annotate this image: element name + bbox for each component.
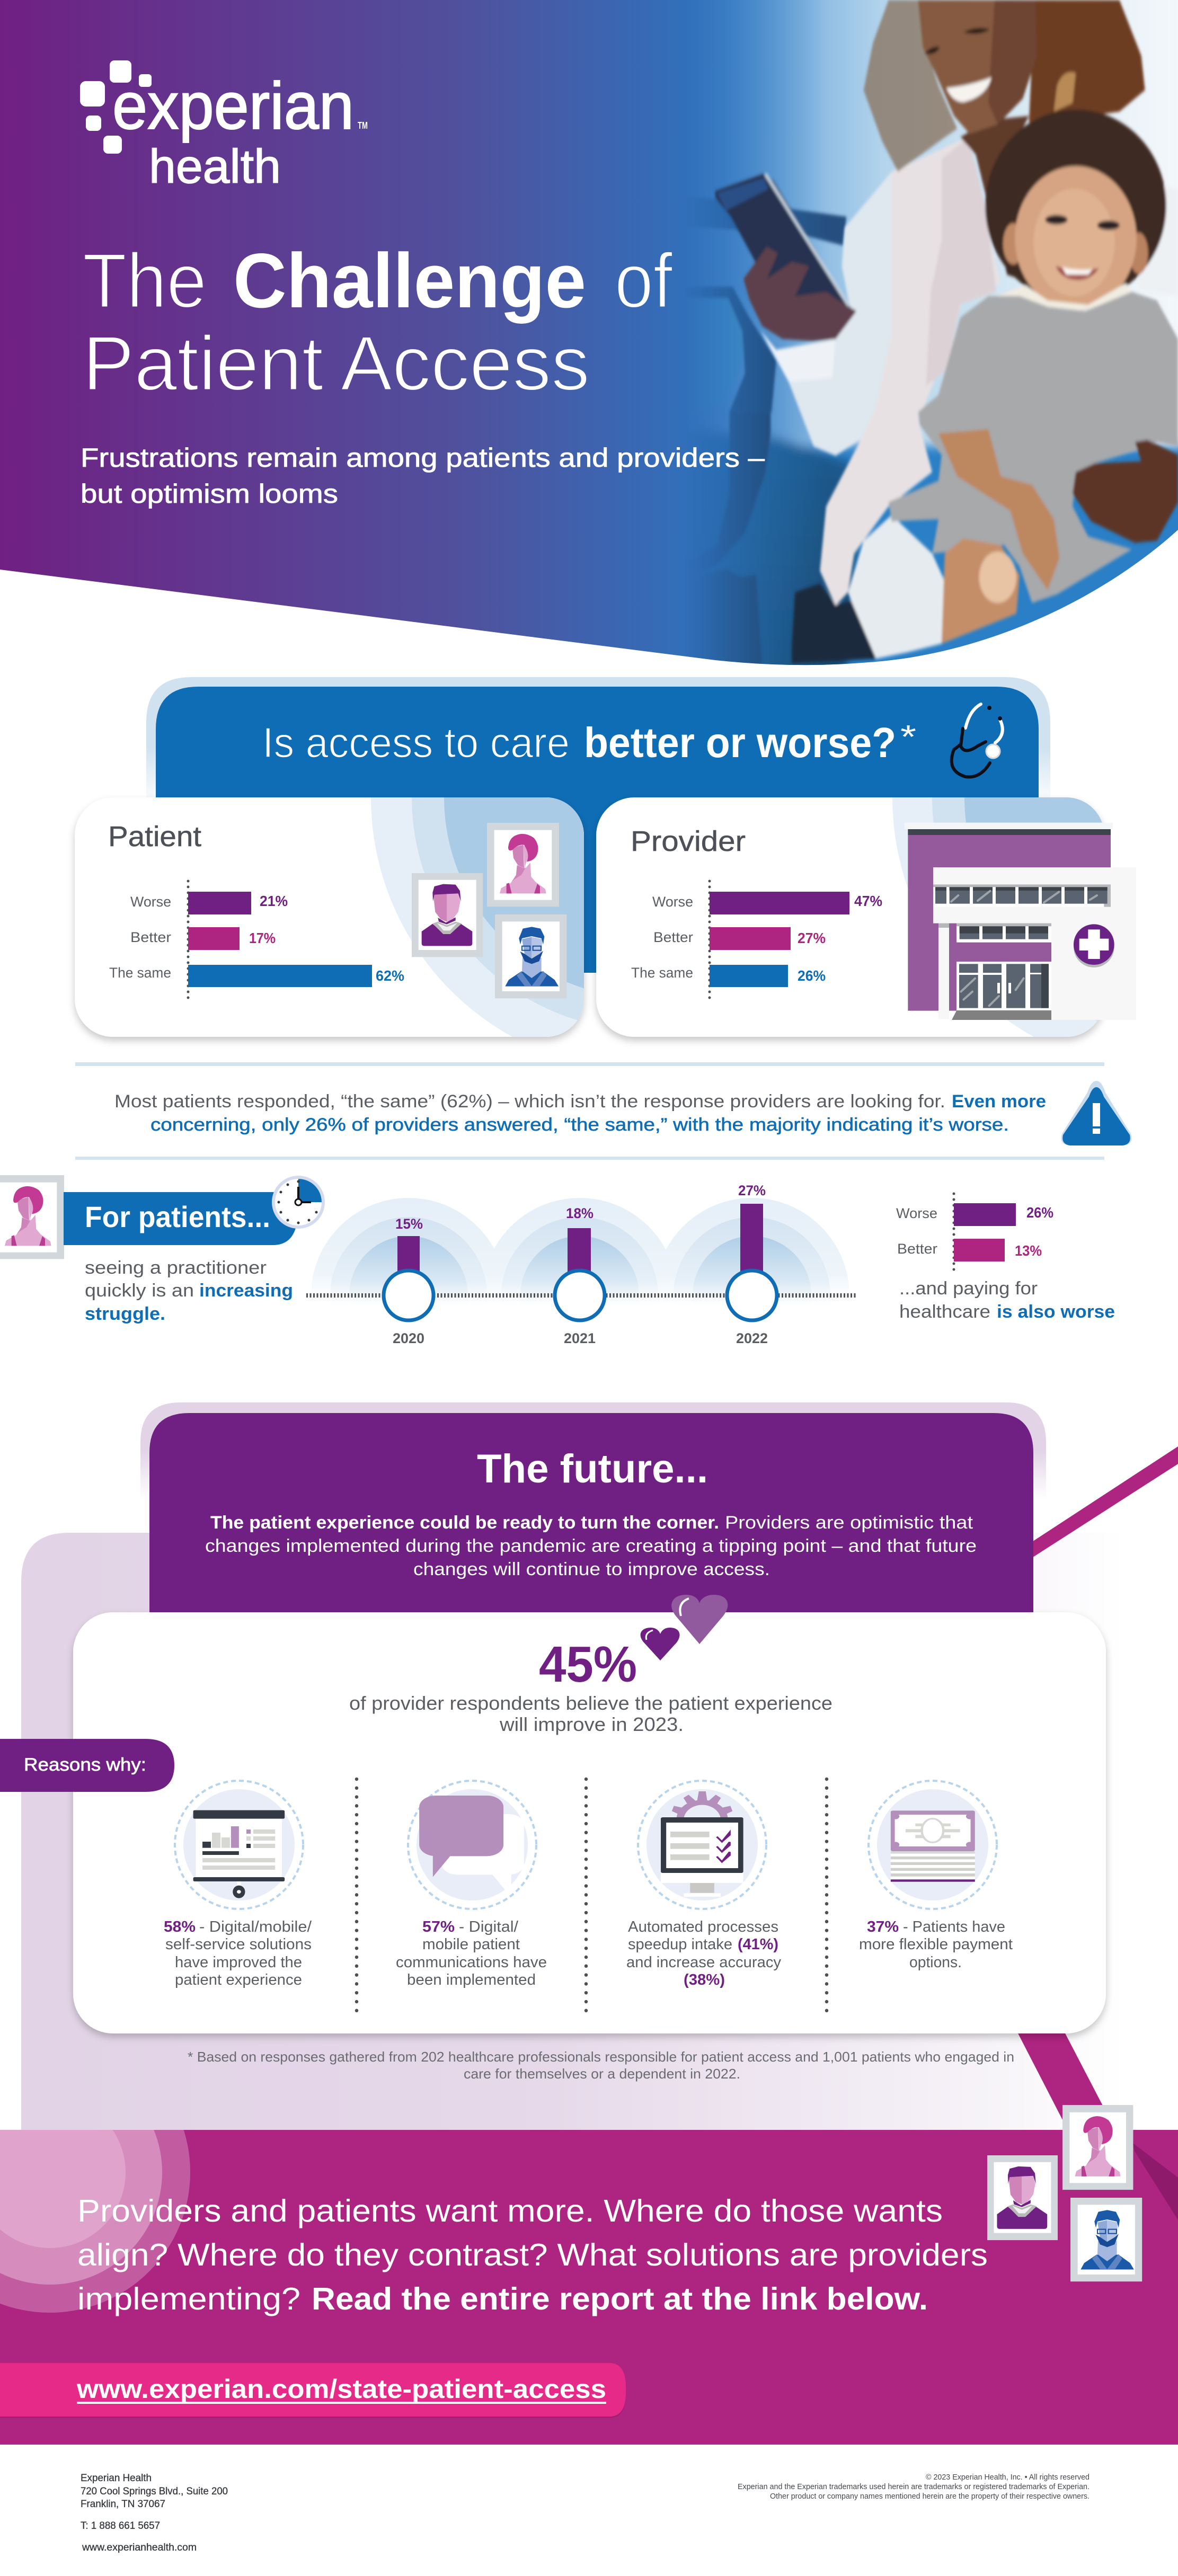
- text: 57%: - Digital/: [459, 1918, 519, 1935]
- bar chart: provider: Worse: [652, 894, 693, 910]
- bar chart: patient: [109, 881, 404, 998]
- text: seeing a practitioner: increasing: [199, 1281, 293, 1301]
- bar chart: paying for healthcare: Better: [897, 1241, 937, 1257]
- icon: hearts: [641, 1595, 728, 1660]
- bar chart: patient: 17%: [249, 930, 276, 946]
- text: 37%: [859, 1918, 1013, 1971]
- logo dots: [80, 60, 152, 154]
- title: Patient Access: [83, 320, 590, 406]
- dividers: [357, 1779, 827, 2013]
- footer: address: Experian Health: [81, 2473, 152, 2484]
- text: automated processes: (38%): [684, 1971, 725, 1988]
- callout: patient and provider response: [75, 1062, 1131, 1160]
- footer: address: 720 Cool Springs Blvd., Suite 200: [81, 2486, 228, 2497]
- icon: woman portrait: [0, 1175, 64, 1259]
- footer: address: [81, 2473, 228, 2553]
- subtitle: [81, 443, 765, 509]
- bar chart: patient: Worse: [130, 894, 171, 910]
- panel: provider: [592, 797, 1114, 1044]
- text: seeing a practitioner: struggle.: [85, 1304, 165, 1324]
- text: call to action: align? Where do they contrast? What solutions are providers: [77, 2237, 988, 2272]
- icon: warning: [1061, 1081, 1131, 1145]
- footnote: [188, 2049, 1014, 2082]
- text: 58%: - Digital/mobile/: [199, 1918, 312, 1935]
- text: future intro: changes will continue to improve access.: [413, 1559, 770, 1579]
- photo: mother and child: [715, 0, 1178, 663]
- callout: patient and provider response: concerning, only 26% of providers answered, “the same,” with the majority indicating it’s worse.: [150, 1115, 1009, 1135]
- bar chart: provider: 47%: [854, 893, 882, 909]
- hero banner: [0, 0, 1178, 689]
- bar chart: patient: Better: [130, 929, 171, 945]
- footer: address: T: 1 888 661 5657: [81, 2520, 160, 2531]
- text: provider respondents: of provider respondents believe the patient experience: [349, 1692, 832, 1714]
- icon: speech bubbles: [408, 1781, 536, 1909]
- text: 37%: 37%: [867, 1918, 899, 1935]
- text: automated processes: Automated processes: [628, 1918, 778, 1935]
- text: automated processes: (41%): [738, 1936, 778, 1953]
- logo: experian health: experian: [112, 69, 354, 143]
- chart: timeline 2020 to 2022: 15%: [395, 1216, 423, 1232]
- tag: reasons why: Reasons why:: [24, 1755, 146, 1775]
- text: future intro: changes implemented during the pandemic are creating a tipping point – and that future: [205, 1536, 977, 1556]
- footer: legal: [738, 2473, 1090, 2501]
- panel: call to action: [0, 2105, 1178, 2445]
- chart: timeline 2020 to 2022: 2021: [564, 1330, 596, 1346]
- bar chart: provider: Better: [653, 929, 693, 945]
- panel: is access better or worse header: [146, 677, 1050, 973]
- heading: Is access to care: [262, 719, 570, 766]
- text: call to action: [77, 2193, 988, 2316]
- text: 58%: patient experience: [175, 1971, 302, 1988]
- tag: reasons why: [0, 1739, 174, 1792]
- footer: legal: Other product or company names mentioned herein are the property of their respective owners.: [770, 2492, 1090, 2501]
- text: 37%: options.: [909, 1954, 962, 1971]
- bar chart: patient: 62%: [376, 967, 404, 984]
- chart: timeline 2020 to 2022: 18%: [566, 1205, 594, 1221]
- reason 1: digital self service: [164, 1781, 312, 1988]
- link bar: www.experian.com/state-patient-access: [76, 2374, 606, 2404]
- text: 58%: have improved the: [175, 1954, 302, 1971]
- text: call to action: Read the entire report at the link below.: [312, 2281, 928, 2316]
- text: future intro: Providers are optimistic that: [725, 1513, 973, 1533]
- icon: money stack: [869, 1781, 997, 1909]
- text: paying for healthcare: healthcare: [899, 1302, 990, 1322]
- footer: address: Franklin, TN 37067: [81, 2499, 165, 2510]
- decorative diagonal band: lower: [1016, 2029, 1118, 2135]
- reason 4: flexible payment: [859, 1781, 1013, 1971]
- text: future intro: The patient experience could be ready to turn the corner.: [210, 1513, 719, 1533]
- text: automated processes: speedup intake: [628, 1936, 732, 1953]
- footer: legal: © 2023 Experian Health, Inc. • All rights reserved: [926, 2473, 1090, 2482]
- panel: for patients: [0, 1175, 323, 1324]
- chart: timeline 2020 to 2022: [306, 1183, 856, 1346]
- panel: future background: [21, 1533, 1123, 2130]
- bar chart: paying for healthcare: [896, 1194, 1115, 1322]
- icon: patient portraits: [412, 823, 566, 998]
- chart: timeline 2020 to 2022: 2020: [393, 1330, 424, 1346]
- bar chart: provider: 27%: [798, 930, 826, 946]
- heading: better or worse?: [584, 719, 896, 766]
- title: of: [615, 237, 672, 324]
- text: call to action: Providers and patients want more. Where do those wants: [77, 2193, 943, 2228]
- text: provider respondents: will improve in 2023.: [499, 1713, 684, 1735]
- icon: tablet chart: [175, 1781, 303, 1909]
- text: 57%: been implemented: [407, 1971, 536, 1988]
- text: call to action: implementing?: [77, 2281, 300, 2316]
- bar chart: provider: [631, 881, 882, 998]
- text: 37%: - Patients have: [903, 1918, 1005, 1935]
- chart: timeline 2020 to 2022: 27%: [738, 1183, 766, 1198]
- text: 57%: mobile patient: [422, 1936, 520, 1953]
- bar chart: paying for healthcare: 26%: [1026, 1204, 1053, 1221]
- heading: *: [900, 719, 916, 756]
- chart: timeline 2020 to 2022: 2022: [736, 1330, 768, 1346]
- title: The: [83, 237, 207, 324]
- text: 58%: self-service solutions: [165, 1936, 312, 1953]
- icon: gear and monitor: [638, 1781, 766, 1909]
- decorative diagonal band: upper: [1028, 1446, 1178, 1560]
- bar chart: provider: The same: [631, 965, 693, 981]
- title: [83, 237, 672, 406]
- footnote: care for themselves or a dependent in 2022.: [464, 2066, 740, 2082]
- footer: legal: Experian and the Experian trademarks used herein are trademarks or registered trademarks of Experian.: [738, 2482, 1090, 2491]
- callout: patient and provider response: Most patients responded, “the same” (62%) – which isn’t the response providers are looking for.: [114, 1091, 945, 1112]
- text: provider respondents: [349, 1692, 832, 1735]
- panel: the future header: [140, 1402, 1046, 1612]
- text: automated processes: [626, 1918, 782, 1988]
- subtitle: Frustrations remain among patients and providers –: [81, 443, 765, 473]
- icon: stethoscope: [952, 704, 1003, 777]
- heading: provider: Provider: [631, 825, 746, 857]
- text: 57%: communications have: [396, 1954, 547, 1971]
- text: future intro: [205, 1513, 977, 1579]
- text: paying for healthcare: ...and paying for: [899, 1278, 1038, 1299]
- footer: address: www.experianhealth.com: [82, 2542, 197, 2553]
- icon: clock: [273, 1177, 323, 1227]
- stat: 45%: 45%: [539, 1636, 637, 1693]
- link bar: [0, 2363, 626, 2418]
- reason 3: automated processes: [626, 1781, 782, 1988]
- text: seeing a practitioner: [85, 1258, 293, 1324]
- bar chart: paying for healthcare: 13%: [1015, 1242, 1042, 1259]
- text: 58%: 58%: [164, 1918, 196, 1935]
- logo: experian health: health: [149, 140, 281, 193]
- text: 58%: [164, 1918, 312, 1988]
- bar chart: patient: 21%: [260, 893, 288, 909]
- callout: patient and provider response: Even more: [952, 1091, 1046, 1112]
- panel: reasons card: [73, 1595, 1106, 2033]
- text: automated processes: and increase accuracy: [626, 1954, 782, 1971]
- text: 57%: [396, 1918, 547, 1988]
- text: paying for healthcare: is also worse: [997, 1302, 1115, 1322]
- subtitle: but optimism looms: [81, 479, 338, 509]
- bar chart: provider: 26%: [798, 967, 826, 984]
- text: seeing a practitioner: quickly is an: [85, 1281, 194, 1301]
- text: 57%: 57%: [422, 1918, 455, 1935]
- text: 37%: more flexible payment: [859, 1936, 1013, 1953]
- logo: experian health: TM: [358, 120, 368, 131]
- bar chart: paying for healthcare: Worse: [896, 1205, 937, 1221]
- banner: for patients: For patients...: [85, 1200, 270, 1233]
- heading: patient: Patient: [108, 821, 201, 852]
- icon: portraits: [987, 2105, 1142, 2281]
- text: seeing a practitioner: seeing a practitioner: [85, 1258, 267, 1278]
- photo: waiting room background: [658, 0, 1178, 687]
- title: Challenge: [233, 237, 586, 324]
- heading: the future: The future...: [477, 1446, 708, 1491]
- footnote: * Based on responses gathered from 202 healthcare professionals responsible for patient access and 1,001 patients who engaged in: [188, 2049, 1014, 2065]
- text: paying for healthcare: [899, 1278, 1115, 1322]
- banner: for patients: [64, 1192, 297, 1245]
- heading: [262, 719, 916, 766]
- logo: experian health: [80, 60, 368, 193]
- bar chart: patient: The same: [109, 965, 171, 981]
- reason 2: patient communications: [396, 1781, 547, 1988]
- panel: patient: [71, 797, 588, 1044]
- icon: hospital building: [905, 823, 1136, 1020]
